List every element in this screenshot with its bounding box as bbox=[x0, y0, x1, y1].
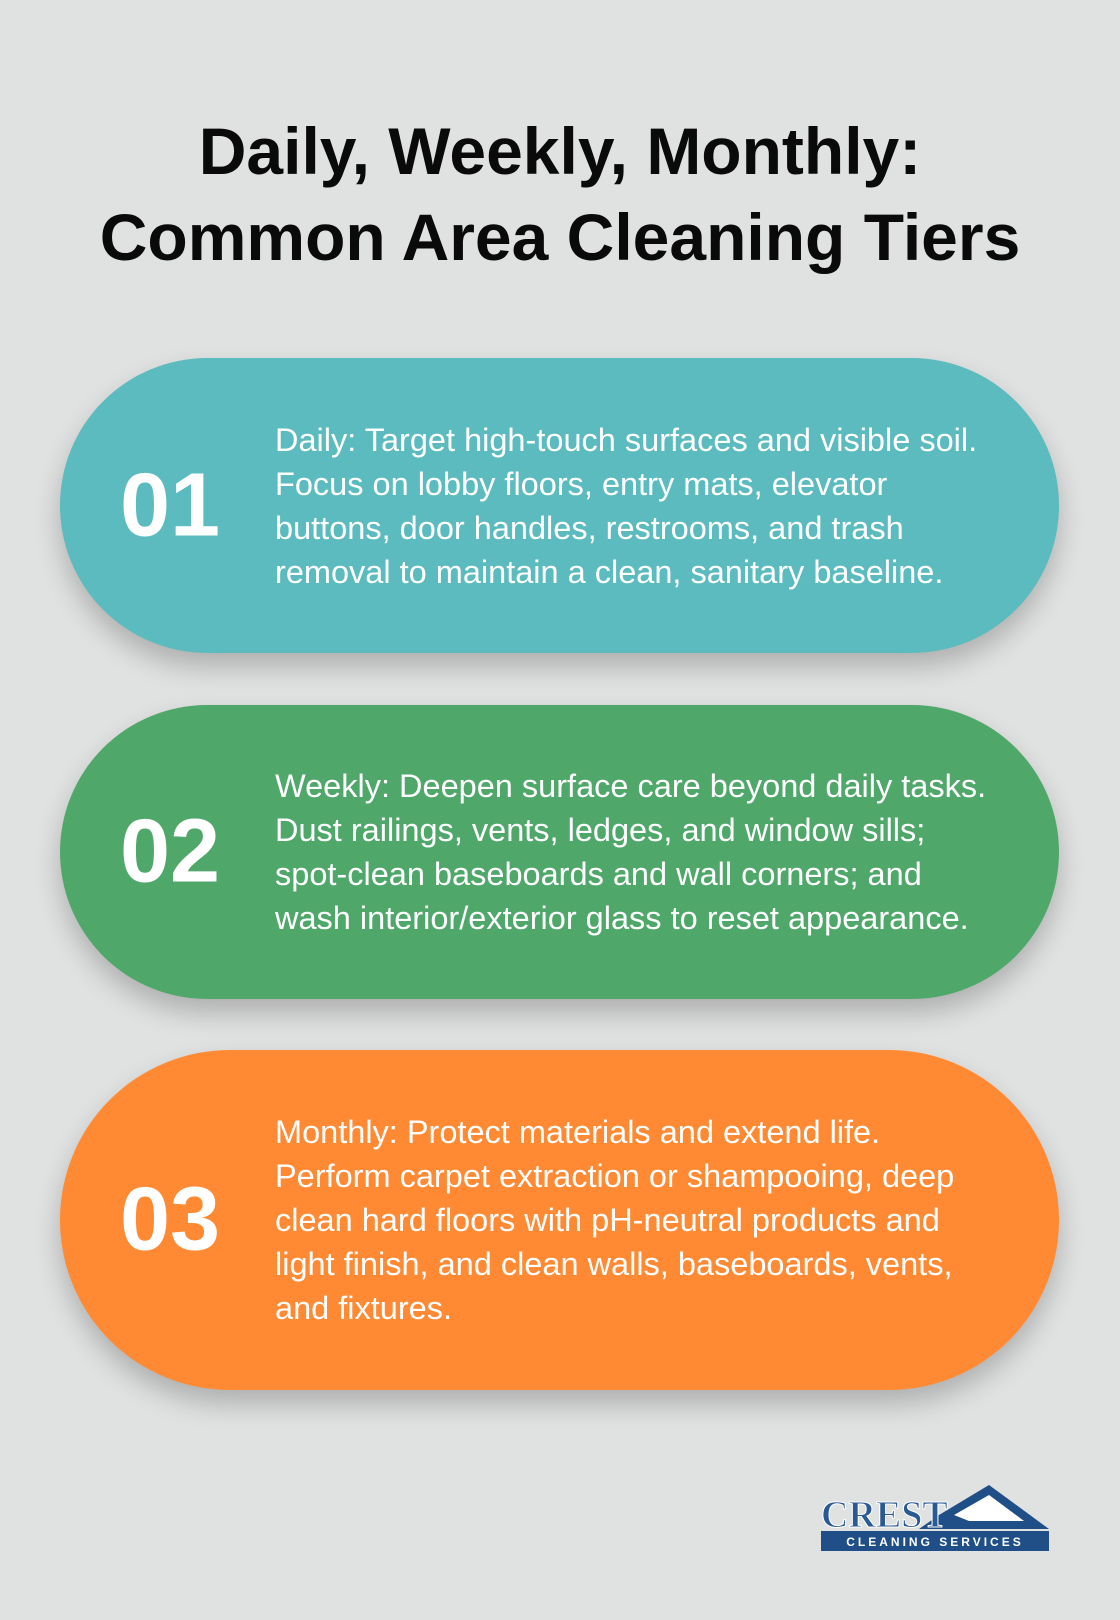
panel: weekly bbox=[60, 705, 1059, 999]
logo: CLEANING SERVICES bbox=[846, 1535, 1024, 1549]
text: weekly: Dust railings, vents, ledges, and window sills; bbox=[275, 812, 925, 848]
text: weekly bbox=[275, 768, 986, 936]
text: weekly: wash interior/exterior glass to reset appearance. bbox=[275, 900, 969, 936]
number 03: 03 bbox=[120, 1170, 220, 1270]
text: monthly: Monthly: Protect materials and extend life. bbox=[275, 1114, 880, 1150]
logo bbox=[821, 1485, 1049, 1551]
panel: daily bbox=[60, 358, 1059, 653]
title bbox=[100, 114, 1020, 274]
text: monthly: light finish, and clean walls, baseboards, vents, bbox=[275, 1246, 952, 1282]
text: daily: Daily: Target high-touch surfaces and visible soil. bbox=[275, 422, 977, 458]
text: daily bbox=[275, 422, 977, 590]
text: weekly: spot-clean baseboards and wall corners; and bbox=[275, 856, 922, 892]
text: monthly: and fixtures. bbox=[275, 1290, 452, 1326]
title: Daily, Weekly, Monthly: bbox=[199, 114, 921, 188]
text: daily: buttons, door handles, restrooms, and trash bbox=[275, 510, 904, 546]
text: monthly bbox=[275, 1114, 954, 1326]
text: monthly: clean hard floors with pH-neutral products and bbox=[275, 1202, 940, 1238]
number 02: 02 bbox=[120, 802, 220, 902]
text: weekly: Weekly: Deepen surface care beyond daily tasks. bbox=[275, 768, 986, 804]
title: Common Area Cleaning Tiers bbox=[100, 200, 1020, 274]
text: daily: Focus on lobby floors, entry mats, elevator bbox=[275, 466, 887, 502]
number 01: 01 bbox=[120, 455, 220, 555]
panel: monthly bbox=[60, 1050, 1059, 1390]
text: daily: removal to maintain a clean, sanitary baseline. bbox=[275, 554, 943, 590]
logo: CREST bbox=[821, 1494, 948, 1536]
text: monthly: Perform carpet extraction or shampooing, deep bbox=[275, 1158, 954, 1194]
